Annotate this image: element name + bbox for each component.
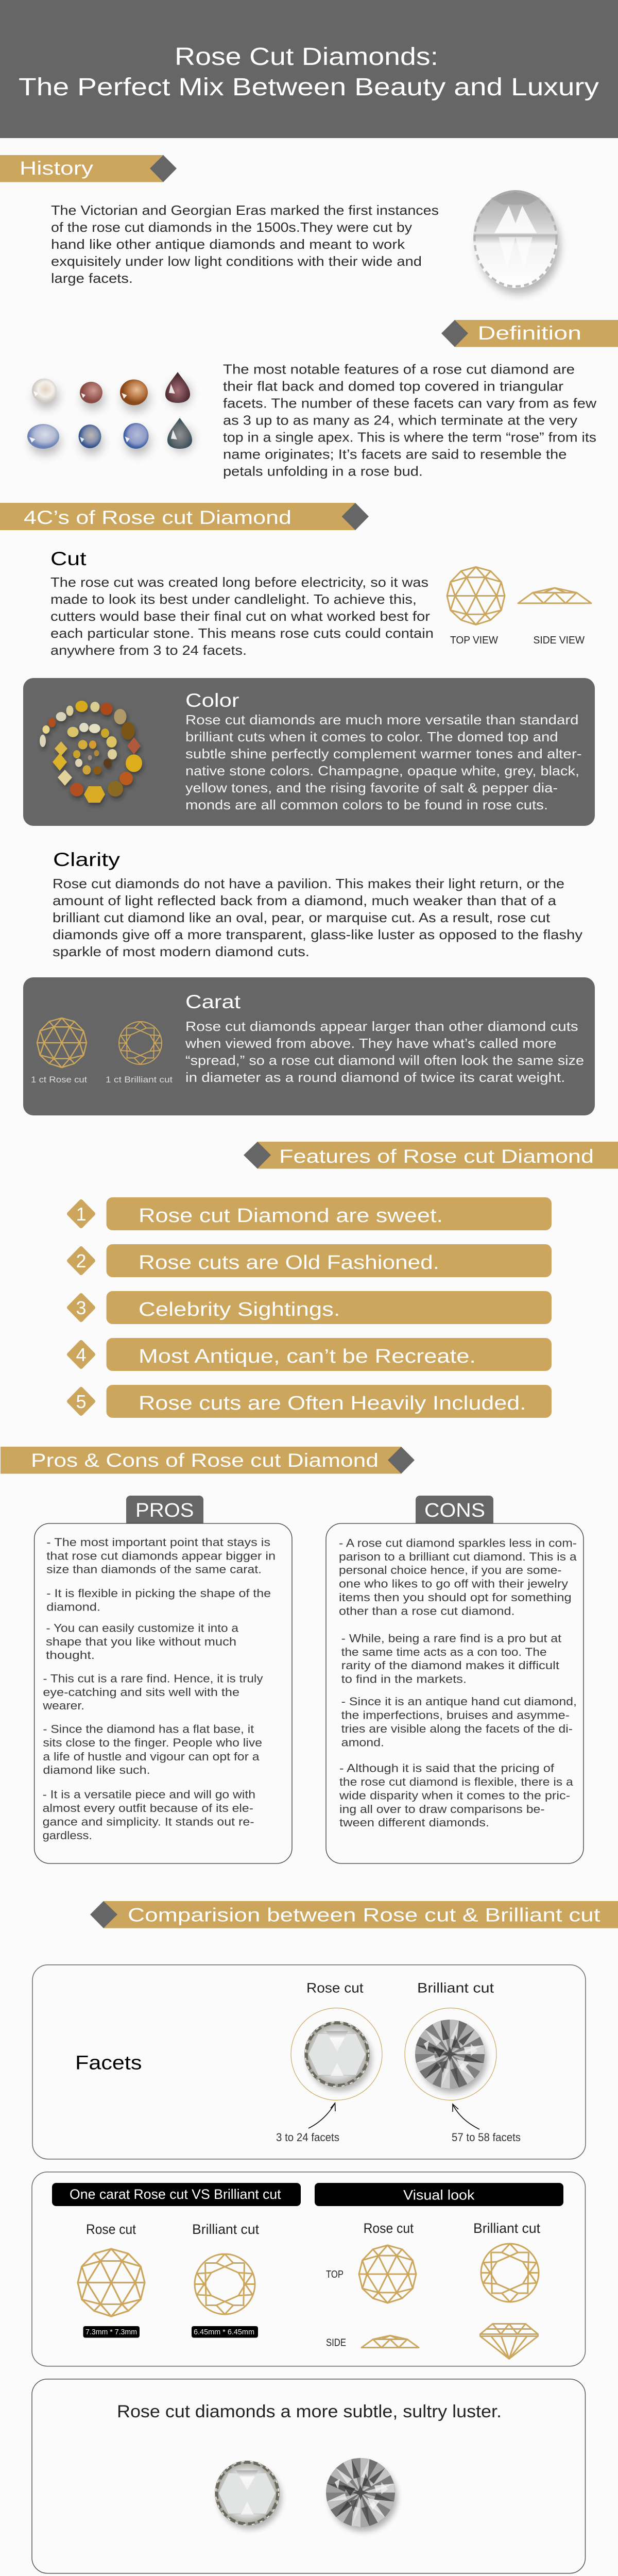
panel: cons [326,1496,583,1863]
heading: History: History [20,158,94,179]
text: history paragraph [51,202,439,286]
text: pros list: diamond. [46,1600,100,1614]
text: clarity paragraph: amount of light reflected back from a diamond, much weaker than that of a [53,893,557,908]
heading: 4C's of Rose cut Diamond [0,503,369,530]
text: cut paragraph: anywhere from 3 to 24 facets. [50,642,247,658]
text: pros list: eye-catching and sits well with the [43,1686,239,1699]
panel: size and visual comparison [32,2172,585,2366]
text: history paragraph: The Victorian and Georgian Eras marked the first instances [51,202,439,218]
text: cons list: wide disparity when it comes to the pric- [339,1789,570,1802]
text: clarity paragraph: sparkle of most modern diamond cuts. [53,944,310,959]
title banner [0,0,618,138]
visual look: rose cut [359,2221,419,2348]
heading: Cut: Cut [50,548,87,569]
text: pros list: size than diamonds of the same carat. [46,1563,262,1576]
header: One carat Rose cut VS Brilliant cut: One carat Rose cut VS Brilliant cut [70,2187,281,2202]
panel: cons: CONS [424,1500,485,1521]
image: rose cut diamond [215,2461,282,2530]
text: cut paragraph: each particular stone. This means rose cuts could contain [50,625,434,641]
panel: luster comparison [32,2379,585,2573]
column: rose cut facets: 3 to 24 facets [276,2131,339,2144]
heading: Color: Color [185,690,239,711]
heading: Definition [441,320,618,347]
panel: pros: PROS [135,1500,194,1521]
heading: History [0,155,177,182]
one carat brilliant cut: Brilliant cut [192,2222,259,2237]
heading: Features of Rose cut Diamond: Features of Rose cut Diamond [279,1146,594,1167]
text: color paragraph: subtle shine perfectly complement warmer tones and alter- [185,746,582,761]
row labels: top and side: SIDE [326,2337,346,2348]
text: cons list: - Since it is an antique hand cut diamond, [341,1695,577,1708]
text: cons list: amond. [341,1736,384,1749]
text: definition paragraph: as 3 up to as many as 24, which terminate at the very [223,412,577,428]
title banner: The Perfect Mix Between Beauty and Luxury [19,74,599,101]
heading: Pros & Cons of Rose cut Diamond: Pros & Cons of Rose cut Diamond [31,1450,379,1471]
image: eight coloured rose cut stones [27,372,193,455]
header: One carat Rose cut VS Brilliant cut [52,2183,301,2206]
text: history paragraph: hand like other antique diamonds and meant to work [51,236,405,252]
text: pros list: a life of hustle and vigour can opt for a [43,1750,260,1763]
list item 1 [69,1197,552,1230]
text: clarity paragraph: Rose cut diamonds do not have a pavilion. This makes their light return, or the [53,876,564,891]
list item 1: Rose cut Diamond are sweet. [139,1205,443,1227]
one carat brilliant cut: 6.45mm * 6.45mm [194,2328,254,2336]
text: cons list: tries are visible along the facets of the di- [341,1722,573,1735]
list item 3 [69,1291,552,1324]
visual look: rose cut: Rose cut [364,2221,414,2236]
label: Facets: Facets [75,2053,142,2074]
one carat rose cut: Rose cut [86,2222,136,2237]
icon: rose cut side view: SIDE VIEW [534,635,585,646]
text: cons list: the imperfections, bruises and asymme- [341,1709,570,1722]
list item 3: Celebrity Sightings. [139,1299,340,1320]
image: spiral of coloured diamonds [40,701,142,803]
heading: 4C's of Rose cut Diamond: 4C’s of Rose cut Diamond [24,507,291,528]
one carat rose cut: 7.3mm * 7.3mm [85,2328,137,2336]
text: cut paragraph: cutters would base their final cut on what worked best for [50,608,430,624]
column: brilliant cut facets: Brilliant cut [417,1980,494,1996]
text: history paragraph: large facets. [51,270,133,286]
panel: facets comparison [32,1965,586,2159]
text: color paragraph [185,712,582,812]
image: oval rose cut diamond [473,190,560,294]
list item 2: 2 [76,1250,87,1272]
visual look: brilliant cut [473,2221,540,2359]
list item 1: 1 [76,1204,87,1225]
title banner: Rose Cut Diamonds: [175,43,438,71]
visual look: brilliant cut: Brilliant cut [473,2221,540,2236]
list item 3: 3 [76,1297,87,1318]
text: definition paragraph: facets. The number of these facets can vary from as few [223,396,596,411]
text: pros list: thought. [46,1649,95,1662]
row labels: top and side [326,2269,346,2348]
column: brilliant cut facets: 57 to 58 facets [452,2131,521,2144]
text: carat paragraph [185,1019,584,1085]
text: clarity paragraph: diamonds give off a more transparent, glass-like luster as opposed to the flashy [53,927,582,942]
text: cons list [339,1536,577,1829]
text: cut paragraph: made to look its best under candlelight. To achieve this, [50,591,417,607]
list item 4: 4 [76,1344,87,1365]
text: carat paragraph: “spread,” so a rose cut diamond will often look the same size [185,1053,584,1068]
text: clarity paragraph [53,876,582,959]
text: cons list: parison to a brilliant cut diamond. This is a [339,1550,577,1563]
text: history paragraph: of the rose cut diamonds in the 1500s.They were cut by [51,219,412,235]
icon: rose cut side view [518,588,591,646]
text: pros list: that rose cut diamonds appear bigger in [46,1550,276,1563]
panel: luster comparison: Rose cut diamonds a more subtle, sultry luster. [117,2402,502,2421]
text: pros list: almost every outfit because of its ele- [43,1802,253,1815]
text: cons list: items then you should opt for something [339,1591,572,1604]
icon: 1 ct brilliant cut outline: 1 ct Brilliant cut [106,1075,173,1084]
text: definition paragraph: petals unfolding in a rose bud. [223,464,423,479]
text: cons list: personal choice hence, if you are some- [339,1564,561,1577]
text: pros list: - It is a versatile piece and will go with [43,1788,255,1801]
text: cons list: - Although it is said that the pricing of [339,1762,555,1774]
text: definition paragraph [223,362,596,479]
text: pros list: gance and simplicity. It stands out re- [43,1816,254,1828]
row labels: top and side: TOP [326,2269,344,2280]
column: rose cut facets: Rose cut [306,1980,364,1996]
text: definition paragraph: name originates; It’s facets are said to resemble the [223,446,566,462]
text: cons list: the same time acts as a con too. The [341,1646,547,1658]
text: cons list: to find in the markets. [341,1672,467,1685]
panel: color [23,678,595,826]
list item 5: 5 [76,1391,87,1412]
text: carat paragraph: in diameter as a round diamond of twice its carat weight. [185,1070,565,1085]
heading: Pros & Cons of Rose cut Diamond [1,1447,415,1473]
text: cons list: other than a rose cut diamond. [339,1605,515,1618]
heading: Carat: Carat [185,991,241,1012]
text: carat paragraph: when viewed from above. They have what’s called more [185,1036,557,1051]
panel: pros [35,1496,292,1863]
text: cons list: tween different diamonds. [339,1816,489,1829]
icon: rose cut top view: TOP VIEW [450,635,498,646]
list item 5 [69,1385,552,1418]
heading: Comparision between Rose cut & Brilliant cut [90,1901,618,1928]
header: Visual look [315,2183,563,2206]
text: pros list: - You can easily customize it into a [46,1622,239,1634]
image: brilliant cut diamond [326,2458,397,2531]
icon: 1 ct rose cut outline: 1 ct Rose cut [31,1075,87,1084]
icon: 1 ct brilliant cut outline [106,1022,173,1084]
text: carat paragraph: Rose cut diamonds appear larger than other diamond cuts [185,1019,578,1034]
text: pros list: diamond like such. [43,1764,150,1776]
heading: Clarity: Clarity [53,849,121,870]
icon: rose cut top view [447,567,505,646]
text: cons list: - While, being a rare find is a pro but at [341,1632,562,1645]
text: definition paragraph: their flat back and domed top covered in triangular [223,378,563,394]
text: pros list: - The most important point that stays is [46,1536,270,1549]
text: pros list [42,1536,276,1842]
text: color paragraph: yellow tones, and the rising favorite of salt & pepper dia- [185,780,558,795]
list item 2 [69,1244,552,1277]
text: pros list: shape that you like without much [46,1635,236,1648]
text: pros list: wearer. [42,1699,84,1712]
header: Visual look: Visual look [403,2188,475,2203]
text: color paragraph: monds are all common colors to be found in rose cuts. [185,797,548,812]
text: definition paragraph: top in a single apex. This is where the term “rose” from its [223,430,596,445]
text: color paragraph: Rose cut diamonds are much more versatile than standard [185,712,579,727]
text: color paragraph: brilliant cuts when it comes to color. The domed top and [185,729,558,744]
list item 2: Rose cuts are Old Fashioned. [139,1252,439,1274]
text: cut paragraph [50,574,434,658]
column: brilliant cut facets [405,1980,521,2144]
heading: Comparision between Rose cut & Brilliant cut: Comparision between Rose cut & Brilliant cut [128,1905,600,1926]
text: cons list: ing all over to draw comparisons be- [339,1803,545,1816]
column: rose cut facets [276,1980,382,2144]
list item 4: Most Antique, can’t be Recreate. [139,1346,476,1367]
text: pros list: gardless. [43,1829,92,1842]
text: cons list: the rose cut diamond is flexible, there is a [339,1775,573,1788]
text: definition paragraph: The most notable features of a rose cut diamond are [223,362,575,377]
list item 5: Rose cuts are Often Heavily Included. [139,1393,526,1414]
heading: Features of Rose cut Diamond [244,1142,618,1168]
text: color paragraph: native stone colors. Champagne, opaque white, grey, black, [185,763,579,778]
text: cut paragraph: The rose cut was created long before electricity, so it was [50,574,428,590]
text: cons list: - A rose cut diamond sparkles less in com- [339,1536,577,1549]
text: pros list: sits close to the finger. People who live [43,1736,262,1749]
text: history paragraph: exquisitely under low light conditions with their wide and [51,253,422,269]
text: cons list: rarity of the diamond makes it difficult [341,1659,560,1672]
panel: carat [23,977,595,1115]
text: pros list: - It is flexible in picking the shape of the [46,1587,271,1600]
text: pros list: - Since the diamond has a flat base, it [43,1723,254,1735]
one carat brilliant cut [192,2222,259,2338]
heading: Definition: Definition [478,323,581,344]
text: clarity paragraph: brilliant cut diamond like an oval, pear, or marquise cut. As a result, rose cut [53,910,551,925]
text: pros list: - This cut is a rare find. Hence, it is truly [43,1672,263,1685]
one carat rose cut [78,2222,145,2338]
text: cons list: one who likes to go off with their jewelry [339,1578,569,1590]
icon: 1 ct rose cut outline [31,1018,87,1084]
list item 4 [69,1338,552,1371]
